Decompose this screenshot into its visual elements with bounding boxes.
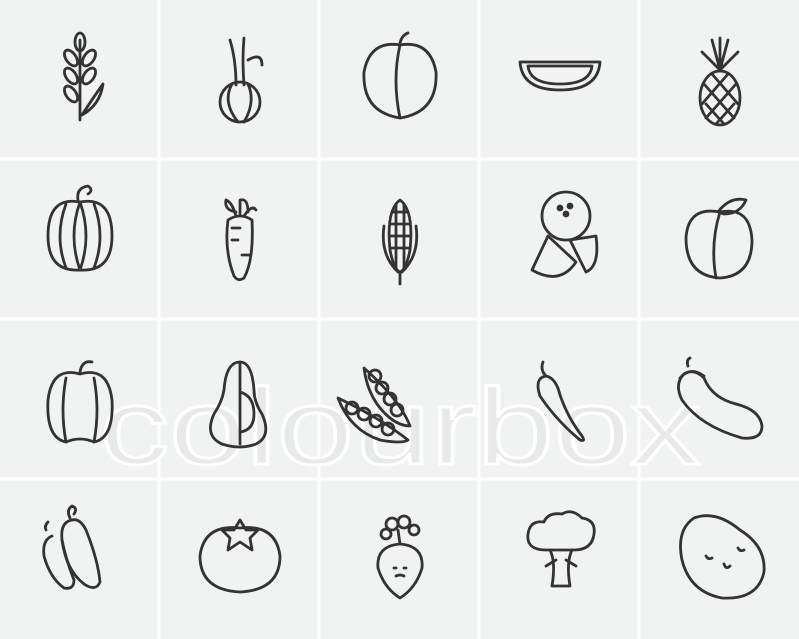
icon: peas — [338, 368, 410, 442]
icon: corn — [383, 200, 417, 284]
watermark: colourbox — [100, 366, 700, 487]
icon: cucumbers — [44, 506, 100, 588]
icon: carrot — [226, 200, 256, 280]
icon: avocado — [210, 362, 266, 447]
icon: bell pepper — [48, 362, 112, 442]
icon: chili — [538, 362, 584, 440]
icon: pumpkin — [48, 186, 112, 270]
icon: wheat — [62, 33, 103, 120]
icon: pineapple — [700, 38, 740, 125]
icon: radish — [378, 516, 422, 598]
icon: peach with leaf — [686, 199, 752, 278]
icon: melon slice — [520, 62, 600, 90]
icon: broccoli — [528, 512, 594, 586]
icon: peach — [364, 33, 436, 118]
icon: potato — [680, 516, 764, 598]
icon: tomato — [200, 520, 280, 592]
icon: eggplant — [678, 358, 762, 438]
icon: coconut — [532, 192, 597, 276]
icon: onion — [220, 38, 262, 122]
